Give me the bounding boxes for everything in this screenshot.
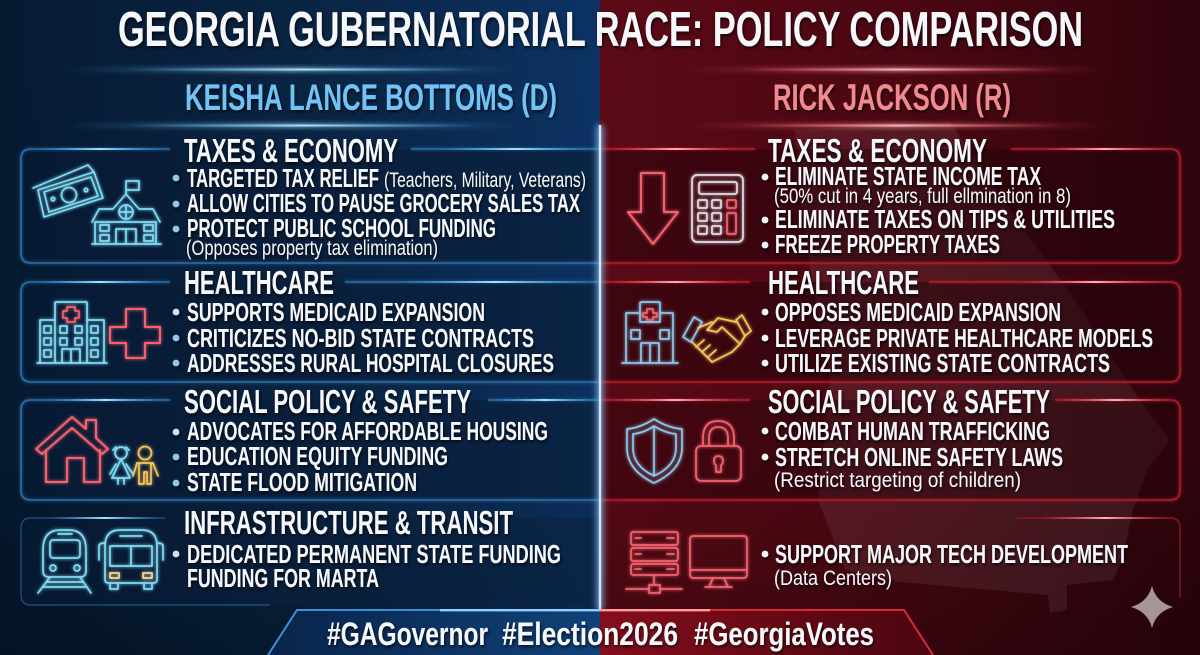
bullet points: FUNDING FOR MARTA [187, 563, 379, 593]
icon: sparkle watermark [1131, 586, 1173, 628]
bullet points: FREEZE PROPERTY TAXES [775, 229, 1000, 259]
bullet points [762, 297, 1153, 378]
bullet points: ALLOW CITIES TO PAUSE GROCERY SALES TAX [187, 188, 580, 218]
bullet points [762, 416, 1063, 492]
bullet points: ELIMINATE STATE INCOME TAX [775, 161, 1041, 191]
panel: Bottoms social policy and safety [21, 383, 600, 500]
hashtags: #GeorgiaVotes [694, 616, 874, 652]
candidate header: Keisha Lance Bottoms [61, 68, 557, 127]
panel: Jackson healthcare [600, 264, 1180, 382]
bullet points [173, 163, 586, 260]
center divider [596, 125, 604, 610]
icon: train and bus [38, 530, 163, 593]
icon: hospital and red cross [37, 302, 160, 363]
panel: Bottoms healthcare [21, 264, 600, 382]
heading: SOCIAL POLICY & SAFETY [184, 383, 471, 420]
candidate header: Keisha Lance Bottoms: KEISHA LANCE BOTTOMS (D) [185, 77, 557, 118]
heading: HEALTHCARE [184, 264, 334, 301]
bullet points: PROTECT PUBLIC SCHOOL FUNDING [187, 213, 496, 243]
bullet points: TARGETED TAX RELIEF [187, 163, 379, 193]
bullet points: COMBAT HUMAN TRAFFICKING [775, 416, 1050, 446]
bullet points: (Data Centers) [774, 567, 892, 590]
heading: SOCIAL POLICY & SAFETY [768, 383, 1050, 420]
icon: down arrow and calculator [628, 173, 743, 244]
Georgia state silhouette [795, 122, 1170, 613]
heading: TAXES & ECONOMY [184, 132, 398, 169]
panel: Jackson technology [626, 517, 1180, 598]
bullet points [173, 416, 548, 497]
background: blue left half [0, 0, 600, 655]
icon: house and children [36, 417, 158, 484]
bullet points: ADVOCATES FOR AFFORDABLE HOUSING [187, 416, 548, 446]
heading: TAXES & ECONOMY [768, 132, 987, 169]
bullet points: (Opposes property tax elimination) [186, 237, 438, 260]
candidate header: Rick Jackson [680, 68, 1110, 127]
bullet points: STRETCH ONLINE SAFETY LAWS [775, 442, 1063, 472]
candidate header: Rick Jackson: RICK JACKSON (R) [773, 77, 1011, 118]
bullet points: CRITICIZES NO-BID STATE CONTRACTS [187, 323, 534, 353]
panel: Bottoms taxes and economy [21, 132, 600, 263]
bullet points: ADDRESSES RURAL HOSPITAL CLOSURES [187, 348, 554, 378]
icon: hospital and handshake [622, 302, 751, 363]
bullet points: OPPOSES MEDICAID EXPANSION [775, 297, 1061, 327]
hashtags: #GAGovernor [327, 616, 488, 652]
bullet points: SUPPORTS MEDICAID EXPANSION [187, 297, 485, 327]
bullet points: (Restrict targeting of children) [774, 469, 1021, 492]
icon: server rack and monitor [626, 532, 747, 593]
icon: shield and padlock [627, 419, 741, 483]
bullet points: (50% cut in 4 years, full ellmination in 8) [774, 185, 1071, 208]
bullet points [762, 539, 1128, 590]
icon: money and school [33, 165, 161, 244]
hashtags [327, 616, 874, 652]
panel: Jackson taxes and economy [600, 132, 1180, 263]
footer banner [268, 609, 933, 655]
heading: HEALTHCARE [768, 264, 919, 301]
panel: Jackson social policy and safety [600, 383, 1180, 500]
background: red right half [600, 0, 1200, 655]
bullet points [173, 539, 561, 593]
hashtags: #Election2026 [502, 616, 678, 652]
bullet points: EDUCATION EQUITY FUNDING [187, 441, 448, 471]
panel: Bottoms infrastructure and transit [21, 504, 600, 605]
bullet points: DEDICATED PERMANENT STATE FUNDING [187, 539, 561, 569]
bullet points: STATE FLOOD MITIGATION [187, 467, 417, 497]
bullet points [173, 297, 554, 378]
heading: INFRASTRUCTURE & TRANSIT [184, 504, 513, 541]
bullet points: (Teachers, Military, Veterans) [384, 169, 586, 192]
bullet points [762, 161, 1115, 259]
